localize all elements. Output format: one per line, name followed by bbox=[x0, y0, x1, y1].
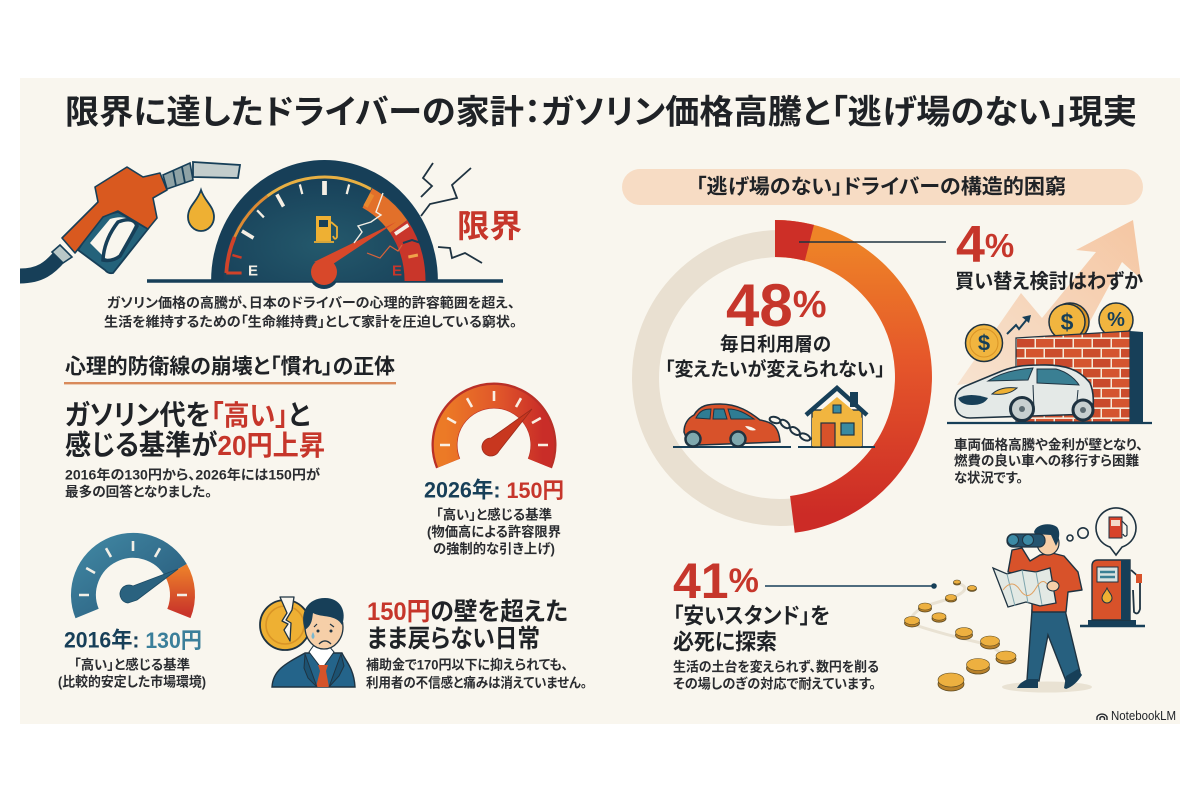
stat 4% bbox=[955, 216, 1143, 293]
map bbox=[993, 568, 1056, 607]
stat 48%: 48% bbox=[726, 272, 827, 338]
right section heading pill bbox=[622, 169, 1143, 205]
headline: threshold up 20 yen: 感じる基準が20円上昇 bbox=[65, 428, 325, 460]
intro text bbox=[104, 294, 517, 330]
icon: brick wall bbox=[1016, 331, 1143, 422]
car bbox=[684, 404, 780, 446]
icon: fuel nozzle bbox=[20, 162, 240, 276]
head bbox=[1037, 531, 1059, 555]
needle bbox=[120, 569, 178, 603]
headline body bbox=[65, 466, 321, 500]
icon: thought bubble with pump bbox=[1067, 508, 1136, 555]
icon: fuel drop bbox=[188, 190, 214, 231]
section heading: psychological defence line: 心理的防衛線の崩壊と「慣れ」の正体 bbox=[65, 356, 395, 378]
stat 4%: 買い替え検討はわずか bbox=[955, 270, 1143, 293]
leader line 4% bbox=[799, 241, 946, 243]
search body text: その場しのぎの対応で耐えています。 bbox=[673, 676, 876, 692]
heading: beyond the 150 yen wall: まま戻らない日常 bbox=[367, 625, 540, 653]
main fuel gauge bbox=[147, 161, 503, 289]
car body text: な状況です。 bbox=[954, 470, 1023, 486]
subsidy body text: 利用者の不信感と痛みは消えていません。 bbox=[366, 674, 587, 690]
label 2026: の強制的な引き上げ) bbox=[433, 540, 555, 556]
icon: fuel pump in gauge bbox=[314, 216, 337, 242]
heading: beyond the 150 yen wall: 150円の壁を超えた bbox=[367, 598, 568, 626]
legs bbox=[1027, 610, 1080, 681]
gauge letters: E bbox=[248, 262, 258, 280]
headline body: 2016年の130円から、2026年には150円が bbox=[65, 466, 321, 482]
subsidy body text: 補助金で170円以下に抑えられても、 bbox=[366, 656, 568, 672]
background panel bbox=[20, 78, 1180, 724]
icon: coins and small arrow bbox=[966, 303, 1133, 362]
icon: person with binoculars and map bbox=[993, 524, 1092, 692]
binoculars bbox=[1007, 534, 1045, 547]
icon: white car bbox=[947, 365, 1152, 423]
needle bbox=[311, 222, 396, 285]
chain bbox=[769, 416, 822, 442]
logo: NotebookLM: NotebookLM bbox=[1111, 709, 1176, 723]
stat 48% bbox=[665, 272, 885, 380]
intro text: 生活を維持するための「生命維持費」として家計を圧迫している窮状。 bbox=[104, 314, 517, 330]
lightning cracks bbox=[421, 163, 482, 263]
car body text: 燃費の良い車への移行すら困難 bbox=[954, 452, 1139, 468]
icon: gas pump bbox=[1080, 560, 1145, 626]
stat 4%: 4% bbox=[956, 216, 1014, 274]
label 2016: 2016年: 130円 bbox=[64, 628, 202, 652]
stat 48%: 毎日利用層の bbox=[720, 334, 831, 356]
donut chart 48% and 4% bbox=[646, 238, 914, 514]
stat 41%: 41% bbox=[673, 553, 759, 609]
gauge 2026 bbox=[440, 391, 548, 464]
icon: coins and small arrow: $ bbox=[978, 330, 990, 356]
stat 48%: 「変えたいが変えられない」 bbox=[665, 358, 885, 380]
label 2026: 「高い」と感じる基準 bbox=[436, 506, 552, 522]
label 2026 bbox=[424, 478, 564, 556]
house bbox=[806, 388, 867, 447]
headline: threshold up 20 yen: ガソリン代を「高い」と bbox=[65, 400, 310, 430]
icon: worried man with broken coin bbox=[260, 597, 355, 687]
right section heading pill: 「逃げ場のない」ドライバーの構造的困窮 bbox=[696, 176, 1066, 198]
label 2016 bbox=[58, 628, 206, 690]
car body text bbox=[954, 436, 1143, 486]
icon: coins and small arrow: $ bbox=[1061, 309, 1074, 335]
label 2016: 「高い」と感じる基準 bbox=[74, 656, 190, 672]
icon: red car chained to house bbox=[673, 388, 875, 447]
label: limit: 限界 bbox=[457, 208, 522, 244]
stat 41%: 必死に探索 bbox=[673, 630, 777, 654]
headline body: 最多の回答となりました。 bbox=[65, 484, 212, 500]
main fuel gauge: E bbox=[392, 262, 402, 280]
arrow: rising cost background bbox=[957, 220, 1141, 385]
headline: threshold up 20 yen bbox=[65, 400, 325, 460]
icon: coins and small arrow: % bbox=[1107, 309, 1125, 331]
search body text: 生活の土台を変えられず、数円を削る bbox=[673, 658, 879, 674]
search body text bbox=[673, 658, 879, 692]
car body text: 車両価格高騰や金利が壁となり、 bbox=[954, 436, 1143, 452]
leader line 41% bbox=[765, 583, 937, 589]
gauge 2016 bbox=[79, 541, 187, 614]
stat 41%: 「安いスタンド」を bbox=[673, 604, 830, 628]
heading: beyond the 150 yen wall bbox=[367, 598, 568, 653]
label 2026: 2026年: 150円 bbox=[424, 478, 564, 502]
label 2026: (物価高による許容限界 bbox=[427, 524, 561, 540]
label 2016: (比較的安定した市場環境) bbox=[58, 674, 206, 690]
subsidy body text bbox=[366, 656, 587, 690]
intro text: ガソリン価格の高騰が、日本のドライバーの心理的許容範囲を超え、 bbox=[107, 294, 515, 310]
torso and arms bbox=[1008, 548, 1082, 612]
title: 限界に達したドライバーの家計：ガソリン価格高騰と「逃げ場のない」現実 bbox=[65, 94, 1137, 132]
icon: coin trail bbox=[904, 580, 1016, 691]
stat 41% bbox=[673, 553, 830, 654]
needle bbox=[482, 409, 532, 456]
